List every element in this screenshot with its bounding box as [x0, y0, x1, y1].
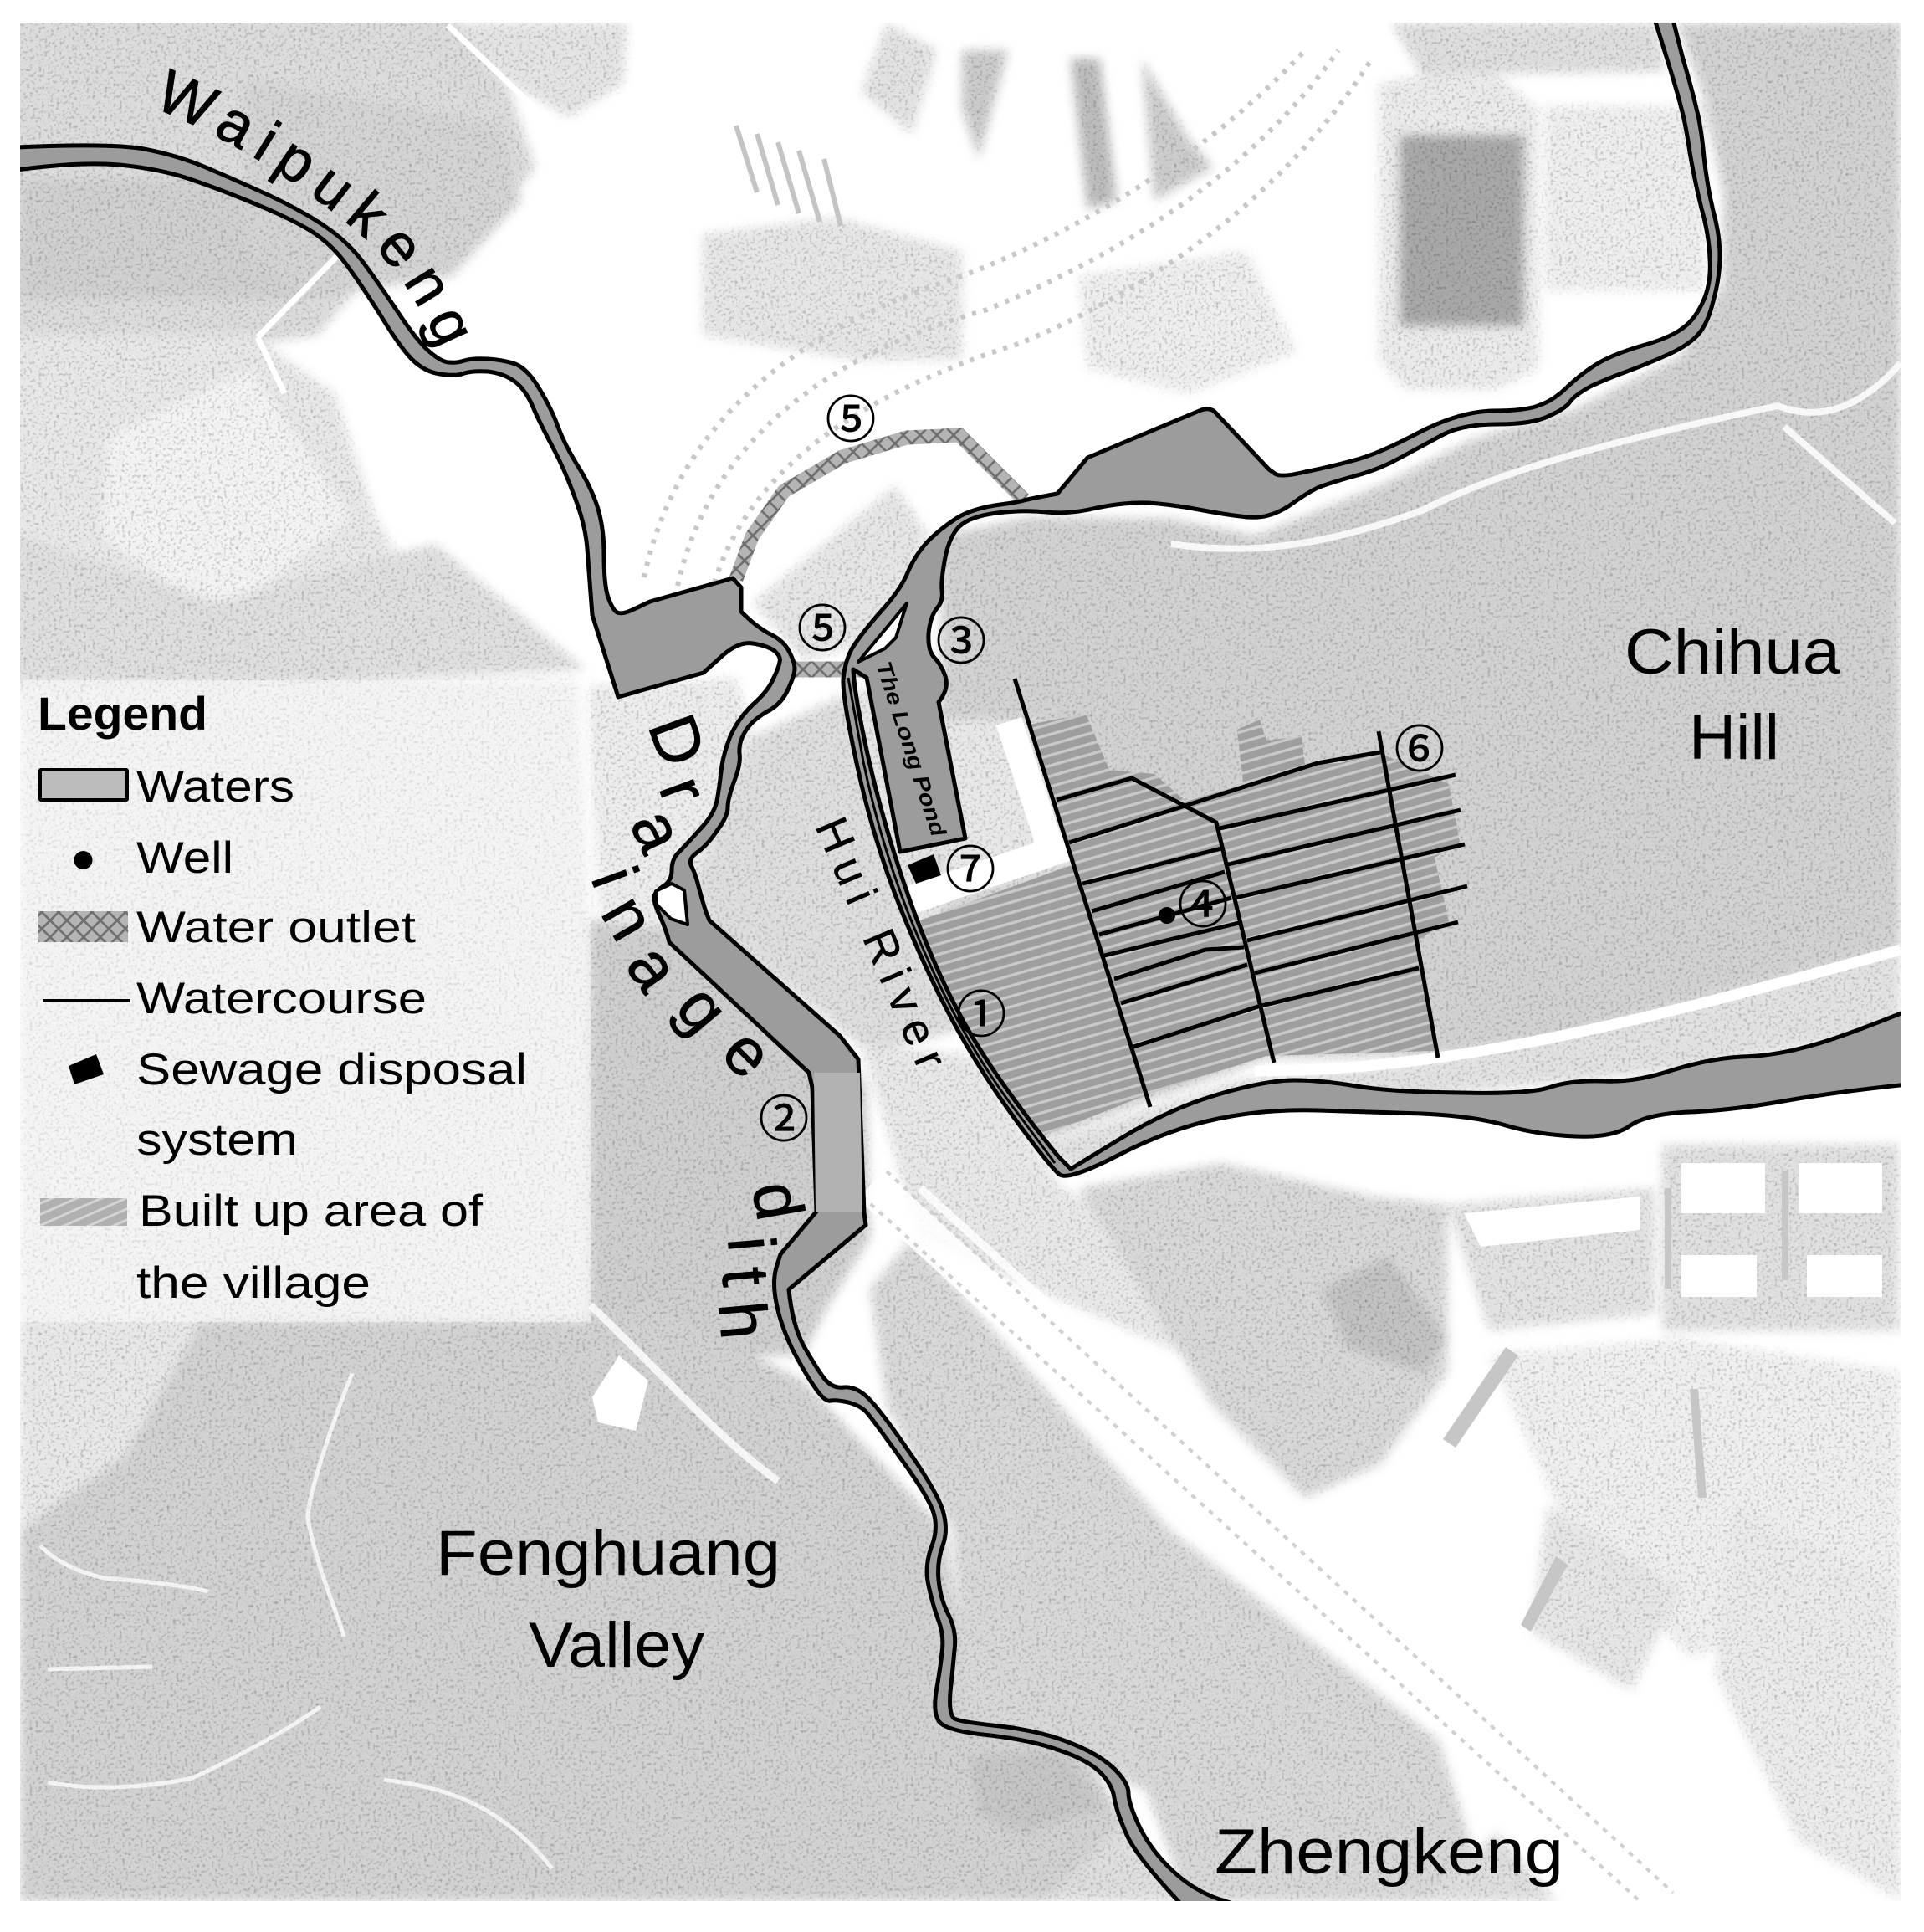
label: Waipukeng: Waipukeng	[163, 68, 468, 348]
highway dots	[853, 1171, 1673, 1901]
legend item: water outlet: Water outlet	[136, 903, 416, 952]
label: Drainage dith: Drainage	[577, 705, 787, 1092]
label: Fenghuang Valley: Fenghuang	[436, 1518, 780, 1589]
label: Fenghuang Valley	[436, 1518, 780, 1681]
marker 6: ⑥	[1394, 710, 1445, 782]
legend	[38, 687, 527, 1308]
label: Chihua Hill: Chihua	[1625, 617, 1841, 688]
water outlet south	[792, 661, 865, 678]
legend item: watercourse: Watercourse	[136, 974, 427, 1023]
legend item: sewage disposal system: system	[136, 1115, 298, 1165]
marker 3: ③	[936, 602, 986, 674]
valley blob	[592, 1355, 648, 1431]
marker 4: ④	[1178, 865, 1228, 938]
legend backing panel	[20, 680, 591, 1322]
label: Chihua Hill	[1625, 617, 1841, 773]
legend item: built up area	[40, 1186, 483, 1308]
building details	[1464, 1163, 1882, 1297]
waters: Waipukeng, pool and drainage ditch	[17, 146, 1246, 1908]
legend item: water outlet	[38, 903, 416, 952]
label: Hui River: Hui River	[806, 810, 956, 1076]
island beside the long pond	[858, 603, 907, 662]
marker 5 south: ⑤	[797, 589, 847, 662]
icon: sewage disposal system	[908, 854, 941, 884]
legend item: sewage disposal system	[69, 1045, 527, 1165]
marker 2: ②	[759, 1079, 809, 1152]
ditch section with lighter fill	[814, 1073, 862, 1212]
label: Fenghuang Valley: Valley	[529, 1610, 704, 1681]
parking rows	[736, 126, 841, 226]
label: Drainage dith: dith	[704, 1176, 818, 1342]
marker 7: ⑦	[945, 830, 995, 903]
built up area of the village	[920, 714, 1460, 1137]
label: Drainage dith	[577, 705, 818, 1342]
legend item: sewage disposal system: Sewage disposal	[136, 1045, 527, 1094]
water outlet north	[736, 435, 1024, 579]
legend item: built up area: Built up area of	[139, 1186, 483, 1236]
label: Zhengkeng: Zhengkeng	[1215, 1817, 1563, 1888]
ring road dots	[644, 50, 1372, 594]
marker 5 north: ⑤	[826, 380, 876, 453]
legend item: waters: Waters	[136, 762, 294, 812]
watercourse grid	[1015, 679, 1467, 1107]
icon: well	[1159, 907, 1175, 924]
waters: Hui River, the long pond and lake	[843, 17, 1907, 1176]
legend heading: Legend	[38, 687, 207, 740]
legend item: well	[74, 833, 233, 883]
legend item: built up area: the village	[136, 1258, 371, 1308]
label: The Long Pond: The Long Pond	[871, 659, 952, 840]
legend item: waters	[40, 762, 294, 812]
marker 1: ①	[956, 975, 1006, 1048]
island in the ditch	[656, 884, 688, 925]
Hui River centre line	[848, 678, 1055, 1163]
label: Chihua Hill: Hill	[1689, 702, 1779, 773]
legend item: well: Well	[136, 833, 233, 883]
